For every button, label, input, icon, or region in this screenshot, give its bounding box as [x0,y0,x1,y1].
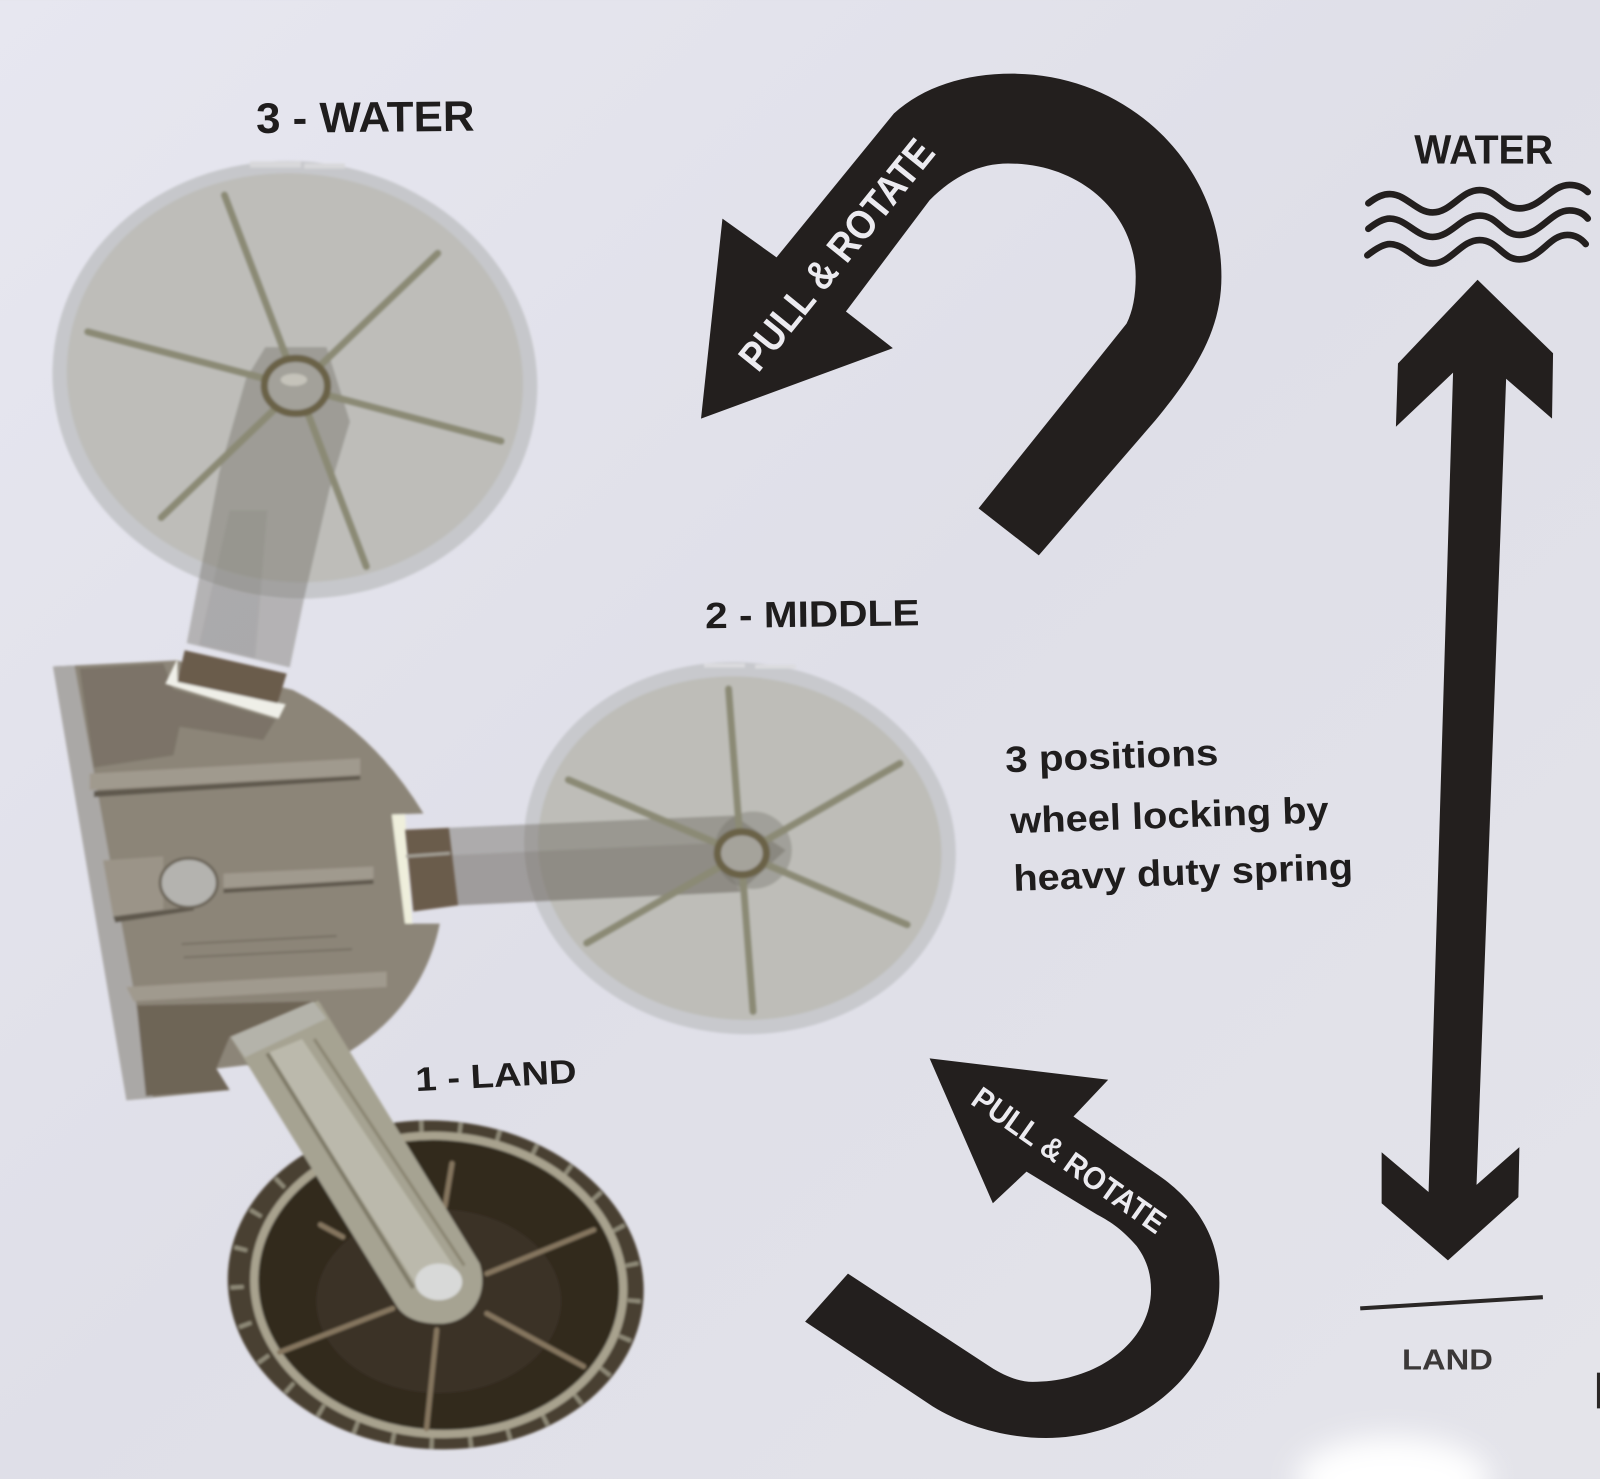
arrow: bottom pull and rotate [805,1058,1219,1438]
label: 2 - MIDDLE: 2 - MIDDLE [705,592,920,636]
wheel 2: middle position [405,641,974,1055]
text block: wheel locking description: heavy duty spring [1013,846,1354,899]
label: WATER: WATER [1414,126,1553,172]
text block: wheel locking description: wheel locking by [1009,789,1330,841]
label: 1 - LAND: 1 - LAND [415,1054,577,1099]
arrow label: top: PULL & ROTATE [729,130,944,379]
arrow: top pull and rotate [701,74,1221,555]
heading: 3 - WATER: 3 - WATER [256,93,475,143]
label: LAND: LAND [1402,1345,1493,1377]
wheel 1: land position [217,1000,655,1463]
arrow label: bottom: PULL & ROTATE [965,1080,1173,1241]
wheel 2 locking tab [405,828,458,911]
land line [1360,1297,1543,1308]
wheel 1 arm [231,1000,482,1324]
mounting plate [53,660,440,1100]
text block: wheel locking description: 3 positions [1004,732,1219,780]
sliding pin [160,858,217,907]
wheel 3 locking tab [165,650,287,719]
double arrow: land to water [1382,280,1553,1260]
wheel 3: water position [24,130,566,668]
text block: wheel locking description [1004,732,1354,899]
wheel 3 arm [187,347,350,668]
wheel 2 arm [449,816,786,905]
icon: water waves [1367,185,1588,263]
